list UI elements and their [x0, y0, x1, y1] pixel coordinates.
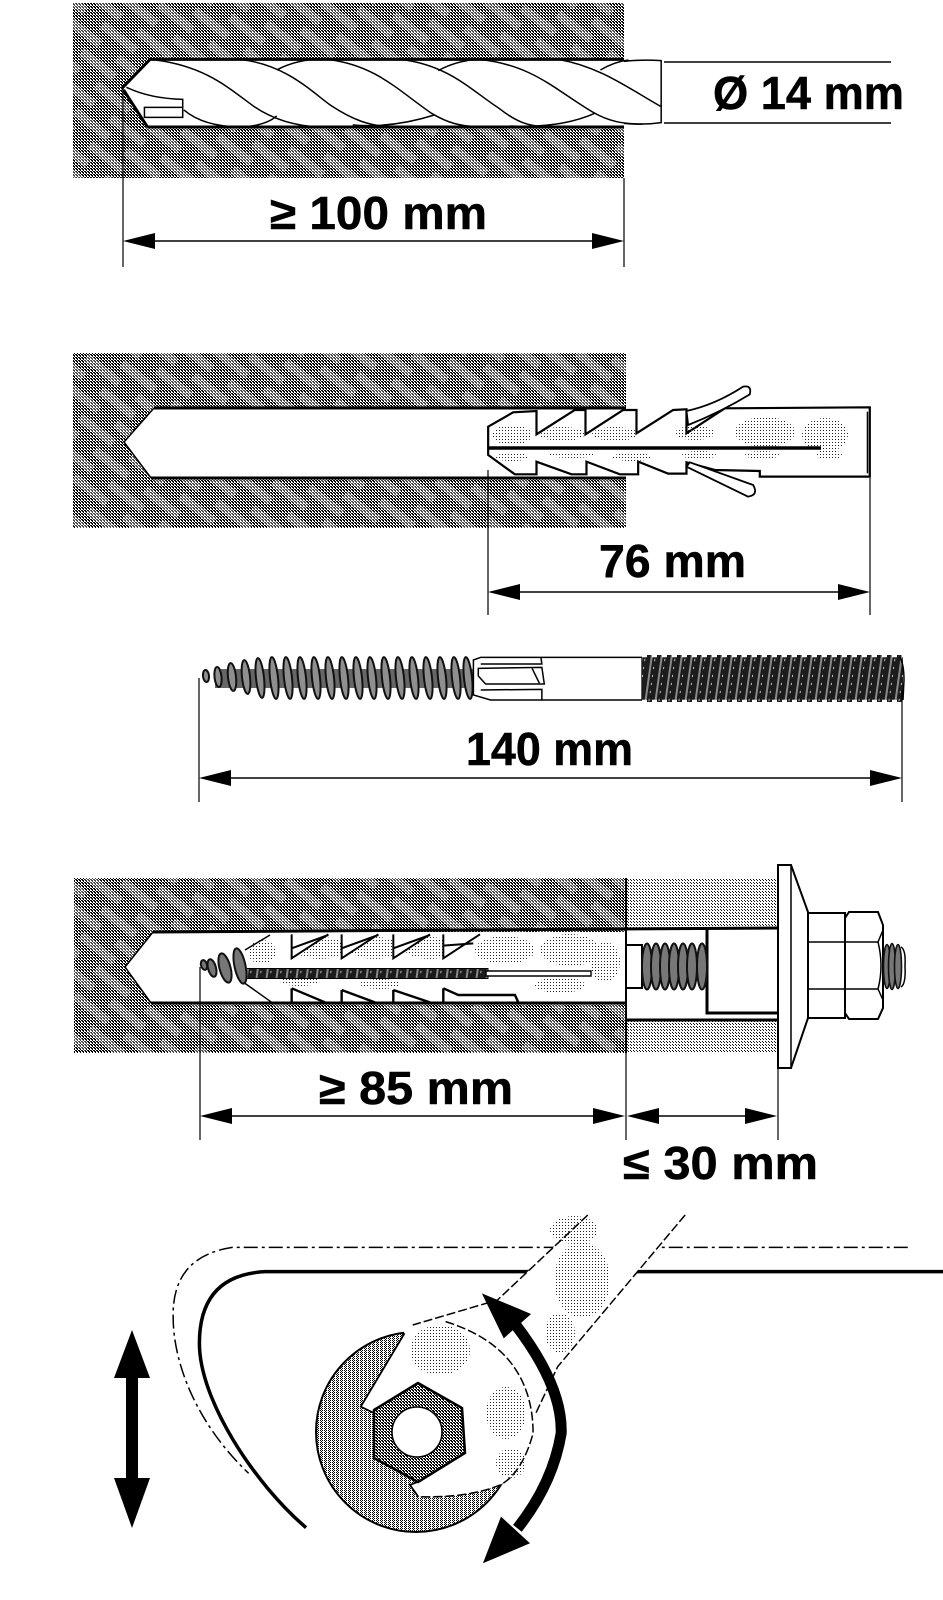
- bore edges: [125, 878, 778, 1053]
- icon: screw inside plug: [200, 947, 591, 985]
- icon: drill bit: [122, 59, 661, 127]
- icon: nuts and stud end: [808, 912, 905, 1019]
- icon: expanded plug outline: [245, 934, 518, 1002]
- dimension: bore depth: [123, 88, 624, 267]
- icon: washer disc: [316, 1332, 516, 1532]
- masonry wall with bore: [73, 353, 626, 528]
- sink body outlines: [173, 1247, 943, 1528]
- icon: wall plug: [488, 386, 870, 497]
- metric thread: [642, 655, 904, 702]
- dimension: plug length: [488, 470, 870, 615]
- label: bore depth: ≥ 100 mm: [270, 187, 487, 239]
- panel: installed anchor: [74, 865, 905, 1189]
- diameter guide lines: [664, 62, 891, 123]
- masonry wall with bore: [74, 878, 626, 1053]
- label: fixture thickness: ≤ 30 mm: [623, 1137, 818, 1189]
- icon: washer: [778, 865, 808, 1068]
- panel: drilling the hole: [73, 3, 904, 267]
- label: screw length: 140 mm: [466, 723, 633, 775]
- panel: tightening with a wrench: [114, 1215, 943, 1563]
- panel: double-ended screw: [199, 655, 904, 802]
- hex drive section: [473, 657, 642, 700]
- icon: wrench: [361, 1215, 685, 1497]
- plug stipple: [248, 934, 620, 993]
- masonry wall with bore: [73, 3, 624, 178]
- dimension: fixture thickness: [627, 1068, 778, 1140]
- label: diameter: Ø 14 mm: [713, 67, 904, 119]
- plate step: [707, 929, 778, 1013]
- arrow: rotation direction: [482, 1293, 561, 1563]
- dimension: screw length: [199, 678, 902, 802]
- dimension: anchorage depth: [200, 967, 626, 1140]
- icon: up-down double arrow: [114, 1330, 150, 1528]
- wood thread: [202, 657, 474, 699]
- attached plate sections: [626, 878, 778, 1053]
- panel: inserting the plug: [73, 353, 870, 615]
- icon: double-ended screw: [202, 655, 904, 702]
- label: anchorage depth: ≥ 85 mm: [319, 1062, 513, 1114]
- label: plug length: 76 mm: [599, 535, 746, 587]
- threaded stud in plate: [626, 944, 707, 990]
- icon: hex nut: [374, 1383, 465, 1482]
